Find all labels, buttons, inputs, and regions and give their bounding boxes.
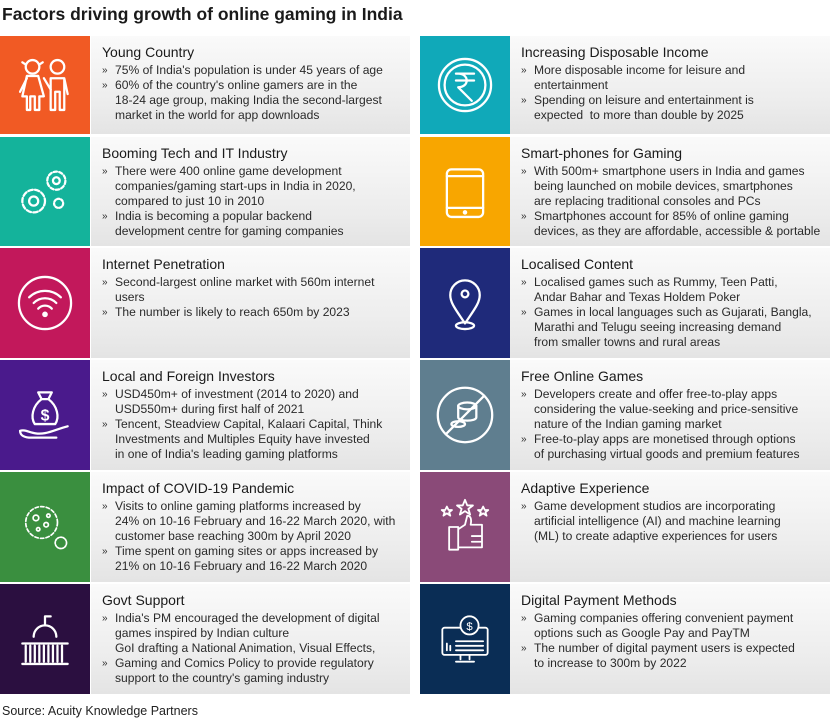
source note: Source: Acuity Knowledge Partners [2, 704, 198, 718]
panel: covid: Impact of COVID-19 Pandemic [102, 480, 294, 496]
panel: booming tech: There were 400 online game development [115, 164, 342, 178]
panel: covid: Visits to online gaming platforms increased by [115, 499, 361, 513]
panel: govt support: Gaming and Comics Policy to provide regulatory [115, 656, 374, 670]
panel: young country: 18-24 age group, making India the second-largest [115, 93, 382, 107]
icon: digital payment [420, 584, 510, 694]
panel: booming tech [91, 137, 410, 246]
panel: digital payment: options such as Google Pay and PayTM [534, 626, 750, 640]
panel: disposable income: entertainment [534, 78, 608, 92]
icon: money bag: $ [41, 408, 50, 425]
panel: localised content: Localised games such as Rummy, Teen Patti, [534, 275, 778, 289]
panel: localised content: Localised Content [521, 256, 633, 272]
panel: investors: Tencent, Steadview Capital, Kalaari Capital, Think [115, 417, 382, 431]
panel: covid [91, 472, 410, 582]
panel: investors: USD550m+ during first half of 2021 [115, 402, 304, 416]
panel: young country: market in the world for app downloads [115, 108, 319, 122]
panel: internet: Second-largest online market with 560m internet [115, 275, 374, 289]
panel: localised content: Andar Bahar and Texas Holdem Poker [534, 290, 740, 304]
panel: investors: in one of India's leading gaming platforms [115, 447, 338, 461]
panel: govt support: India's PM encouraged the development of digital [115, 611, 380, 625]
panel: internet: Internet Penetration [102, 256, 225, 272]
panel: disposable income: expected to more than double by 2025 [534, 108, 744, 122]
icon: digital payment: $ [466, 621, 473, 633]
panel: investors: Local and Foreign Investors [102, 368, 275, 384]
panel: govt support [91, 584, 410, 694]
panel: disposable income: More disposable income for leisure and [534, 63, 745, 77]
panel: digital payment [510, 584, 830, 694]
icon: virus [0, 472, 90, 582]
panel: booming tech: development centre for gaming companies [115, 224, 344, 238]
panel: free online games: considering the value-seeking and price-sensitive [534, 402, 798, 416]
panel: investors [91, 360, 410, 470]
panel: govt support: Govt Support [102, 592, 184, 608]
panel: disposable income: Spending on leisure and entertainment is [534, 93, 754, 107]
title: Factors driving growth of online gaming in India [2, 4, 403, 24]
panel: smartphones: Smartphones account for 85% of online gaming [534, 209, 789, 223]
panel: covid: Time spent on gaming sites or apps increased by [115, 544, 378, 558]
icon: free (no coins) [420, 360, 510, 470]
panel: disposable income [510, 36, 830, 134]
icon: rupee [420, 36, 510, 134]
icon: money bag [0, 360, 90, 470]
panel: adaptive experience [510, 472, 830, 582]
panel: localised content: from smaller towns and rural areas [534, 335, 720, 349]
icon: gears [0, 137, 90, 246]
panel: booming tech: companies/gaming start-ups in India in 2020, [115, 179, 356, 193]
panel: govt support: games inspired by Indian culture [115, 626, 289, 640]
icon: young country [0, 36, 90, 134]
panel: adaptive experience: Adaptive Experience [521, 480, 649, 496]
panel: smartphones: Smart-phones for Gaming [521, 145, 682, 161]
panel: free online games: of purchasing virtual goods and premium features [534, 447, 800, 461]
panel: booming tech: compared to just 10 in 2010 [115, 194, 264, 208]
icon: wifi [0, 248, 90, 358]
panel: internet: users [115, 290, 145, 304]
panel: booming tech: India is becoming a popular backend [115, 209, 312, 223]
panel: digital payment: The number of digital payment users is expected [534, 641, 795, 655]
panel: smartphones [510, 137, 830, 246]
panel: govt support: GoI drafting a National Animation, Visual Effects, [115, 641, 375, 655]
panel: internet [91, 248, 410, 358]
icon: parliament [0, 584, 90, 694]
panel: booming tech: Booming Tech and IT Industry [102, 145, 287, 161]
panel: adaptive experience: artificial intelligence (AI) and machine learning [534, 514, 781, 528]
panel: covid: 21% on 10-16 February and 16-22 March 2020 [115, 559, 367, 573]
panel: localised content [510, 248, 830, 358]
panel: young country: 75% of India's population is under 45 years of age [115, 63, 383, 77]
panel: localised content: Marathi and Telugu seeing increasing demand [534, 320, 781, 334]
panel: internet: The number is likely to reach 650m by 2023 [115, 305, 350, 319]
panel: adaptive experience: (ML) to create adaptive experiences for users [534, 529, 777, 543]
panel: free online games: nature of the Indian gaming market [534, 417, 722, 431]
panel: free online games: Free Online Games [521, 368, 643, 384]
panel: young country: Young Country [102, 44, 194, 60]
panel: govt support: support to the country's gaming industry [115, 671, 329, 685]
panel: disposable income: Increasing Disposable Income [521, 44, 709, 60]
panel: smartphones: are replacing traditional consoles and PCs [534, 194, 761, 208]
panel: localised content: Games in local languages such as Gujarati, Bangla, [534, 305, 812, 319]
icon: smartphone [420, 137, 510, 246]
panel: free online games: Free-to-play apps are monetised through options [534, 432, 796, 446]
panel: covid: 24% on 10-16 February and 16-22 March 2020, with [115, 514, 395, 528]
panel: investors: USD450m+ of investment (2014 to 2020) and [115, 387, 359, 401]
panel: young country: 60% of the country's online gamers are in the [115, 78, 357, 92]
panel: free online games: Developers create and offer free-to-play apps [534, 387, 777, 401]
icon: location pin [420, 248, 510, 358]
panel: smartphones: devices, as they are affordable, accessible & portable [534, 224, 820, 238]
panel: investors: Investments and Multiples Equity have invested [115, 432, 370, 446]
panel: free online games [510, 360, 830, 470]
panel: smartphones: being launched on mobile devices, smartphones [534, 179, 793, 193]
panel: digital payment: Digital Payment Methods [521, 592, 677, 608]
panel: smartphones: With 500m+ smartphone users in India and games [534, 164, 805, 178]
panel: adaptive experience: Game development studios are incorporating [534, 499, 775, 513]
panel: covid: customer base reaching 300m by April 2020 [115, 529, 351, 543]
panel: digital payment: to increase to 300m by 2022 [534, 656, 687, 670]
panel: digital payment: Gaming companies offering convenient payment [534, 611, 793, 625]
panel: young country [91, 36, 410, 134]
icon: thumbs up stars [420, 472, 510, 582]
